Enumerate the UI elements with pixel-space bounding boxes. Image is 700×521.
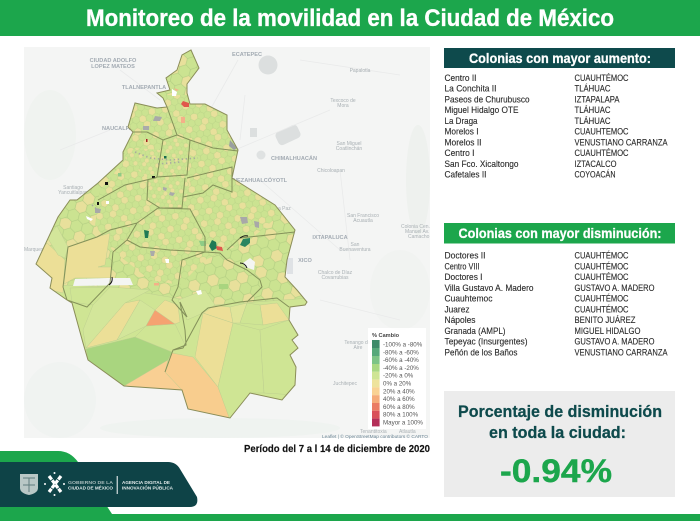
list: aumento colonias: Miguel Hidalgo OTE xyxy=(444,105,518,115)
list: disminución colonias: Nápoles xyxy=(444,315,476,325)
list: disminución colonias: Doctores I xyxy=(444,272,482,282)
heading: aumento xyxy=(444,48,675,68)
list: disminución colonias: Cuauhtemoc xyxy=(444,294,493,304)
map place labels: Aire xyxy=(354,345,363,351)
legend: 40% a 60% xyxy=(383,396,415,403)
gray speckle in dense central colonias xyxy=(92,152,198,212)
list: aumento alcaldías: COYOACÁN xyxy=(574,170,616,180)
callout value: -0.94% xyxy=(500,453,612,489)
list: disminución colonias: Tepeyac (Insurgentes) xyxy=(444,337,528,347)
panel: colonias con mayor disminución xyxy=(444,223,675,357)
list: disminución alcaldías: MIGUEL HIDALGO xyxy=(574,326,640,336)
map place labels: Juchitepec xyxy=(333,381,357,387)
heading: disminución xyxy=(444,223,675,244)
map place labels: Tenantitoxia xyxy=(360,429,387,435)
map place labels: San Miguel xyxy=(336,141,362,147)
logo divider xyxy=(117,476,118,494)
map place labels: NAUCALPAN xyxy=(102,126,137,132)
list: aumento colonias: La Draga xyxy=(444,116,478,126)
title banner xyxy=(0,0,700,36)
list: disminución alcaldías: GUSTAVO A. MADERO xyxy=(574,337,654,347)
list: aumento alcaldías: IZTAPALAPA xyxy=(574,94,620,104)
legend xyxy=(368,328,426,429)
heading: disminución: Colonias con mayor disminución: xyxy=(458,226,662,241)
period caption: Período del 7 a l 14 de diciembre de 2020 xyxy=(244,443,430,455)
map place labels: Covarrubias xyxy=(322,275,349,281)
list: aumento alcaldías xyxy=(574,73,668,180)
list: aumento colonias: Cafetales II xyxy=(444,170,486,180)
panel: colonias con mayor aumento xyxy=(444,48,675,180)
legend: Mayor a 100% xyxy=(383,420,423,426)
icon: CDMX cross emblem xyxy=(44,472,65,496)
list: aumento colonias: San Fco. Xicaltongo xyxy=(444,159,518,169)
map place labels: IXTAPALUCA xyxy=(312,235,348,241)
list: disminución alcaldías: CUAUHTÉMOC xyxy=(574,272,629,282)
logo text: agencia xyxy=(122,480,174,490)
map basemap xyxy=(24,47,430,438)
legend: -40% a -20% xyxy=(383,365,419,372)
map place labels: Chalco de Díaz xyxy=(318,270,353,276)
callout label: Porcentaje de disminución xyxy=(458,403,662,421)
city outline xyxy=(36,50,307,418)
map place labels: TLALNEPANTLA xyxy=(122,85,166,91)
title banner: Monitoreo de la movilidad en la Ciudad de México xyxy=(86,5,614,32)
map place labels: La Paz xyxy=(275,206,291,212)
list: disminución alcaldías: GUSTAVO A. MADERO xyxy=(574,283,654,293)
legend: -20% a 0% xyxy=(383,373,414,380)
map place labels: Manuel Av. xyxy=(405,229,429,235)
list: disminución colonias: Villa Gustavo A. Madero xyxy=(444,283,534,293)
map place labels: San Francisco xyxy=(347,213,379,219)
legend: 20% a 40% xyxy=(383,388,415,395)
callout label: en toda la ciudad: xyxy=(489,424,626,442)
map place labels: CHIMALHUACÁN xyxy=(271,155,317,162)
list: aumento alcaldías: CUAUHTEMOC xyxy=(574,127,629,137)
footer band xyxy=(0,451,700,521)
map place labels: ECATEPEC xyxy=(232,52,262,58)
choropleth of Ciudad de México xyxy=(36,50,306,418)
map place labels: XICO xyxy=(298,258,312,264)
footer logos xyxy=(20,472,174,496)
boundaries between alcaldías xyxy=(63,107,295,372)
list: aumento colonias: Morelos II xyxy=(444,137,482,147)
map place labels: Buenaventura xyxy=(339,247,371,253)
black line segments xyxy=(109,236,248,285)
heading: aumento: Colonias con mayor aumento: xyxy=(469,51,651,66)
logo text: gobierno: CIUDAD DE MÉXICO xyxy=(68,486,114,490)
list: disminución colonias xyxy=(444,251,534,357)
panel: porcentaje de disminución xyxy=(444,391,675,497)
list: disminución alcaldías: CUAUHTÉMOC xyxy=(574,294,629,304)
panel: map xyxy=(24,47,430,439)
list: disminución colonias: Granada (AMPL) xyxy=(444,326,506,336)
map place labels: Tenango del xyxy=(344,340,372,346)
legend: 80% a 100% xyxy=(383,412,419,419)
list: disminución alcaldías: CUAUHTÉMOC xyxy=(574,251,629,261)
list: disminución colonias: Centro VIII xyxy=(444,261,480,271)
map place labels: Yancuitlalpan xyxy=(58,190,88,196)
list: aumento alcaldías: TLÁHUAC xyxy=(574,105,611,115)
list: aumento alcaldías: CUAUHTÉMOC xyxy=(574,73,629,83)
map place labels xyxy=(24,52,430,435)
map attribution: Leaflet | © OpenStreetMap contributors © CARTO xyxy=(322,433,428,439)
logo text: gobierno: GOBIERNO DE LA xyxy=(68,480,114,485)
list: disminución alcaldías: CUAUHTÉMOC xyxy=(574,261,629,271)
list: disminución alcaldías: BENITO JUÁREZ xyxy=(574,315,636,325)
legend: -100% a -80% xyxy=(383,342,423,348)
list: disminución alcaldías: VENUSTIANO CARRANZA xyxy=(574,347,668,357)
list: disminución colonias: Juarez xyxy=(444,304,470,314)
map place labels: Colonia Cen. xyxy=(401,224,430,230)
map place labels: Santiago xyxy=(63,185,83,191)
list: aumento colonias: Centro I xyxy=(444,148,474,158)
list: disminución colonias: Doctores II xyxy=(444,251,486,261)
list: disminución alcaldías xyxy=(574,251,668,357)
list: aumento alcaldías: CUAUHTÉMOC xyxy=(574,148,629,158)
map place labels: Papalotla xyxy=(350,68,371,74)
large southern and western polygons xyxy=(30,226,310,420)
map place labels: Chicoloapan xyxy=(317,168,345,174)
map place labels: Marquesa xyxy=(24,247,46,253)
map place labels: Coatlinchán xyxy=(336,146,362,152)
logo text: agencia: INNOVACIÓN PÚBLICA xyxy=(122,486,174,490)
map place labels: San xyxy=(351,242,360,248)
list: aumento colonias: La Conchita II xyxy=(444,84,496,94)
list: aumento colonias: Centro II xyxy=(444,73,476,83)
list: aumento alcaldías: TLÁHUAC xyxy=(574,84,611,94)
legend: % Cambio xyxy=(372,333,400,339)
legend: -80% a -60% xyxy=(383,349,419,356)
list: disminución alcaldías: CUAUHTÉMOC xyxy=(574,304,629,314)
list: aumento alcaldías: VENUSTIANO CARRANZA xyxy=(574,137,668,147)
list: aumento colonias: Morelos I xyxy=(444,127,478,137)
list: aumento colonias: Paseos de Churubusco xyxy=(444,94,530,104)
icon: coat of arms shield xyxy=(20,474,38,495)
map place labels: LOPEZ MATEOS xyxy=(91,64,135,70)
list: disminución colonias: Peñón de los Baños xyxy=(444,347,518,357)
map place labels: Atlautla xyxy=(399,429,416,435)
map place labels: Acuautla xyxy=(353,218,373,224)
legend: -60% a -40% xyxy=(383,357,419,364)
logo text: agencia: AGENCIA DIGITAL DE xyxy=(122,480,170,485)
legend: 0% a 20% xyxy=(383,380,412,388)
logo text: gobierno xyxy=(68,480,114,490)
callout label xyxy=(458,403,662,442)
map place labels: Texcoco de xyxy=(330,98,356,104)
map place labels: CIUDAD ADOLFO xyxy=(90,58,137,64)
list: aumento alcaldías: TLÁHUAC xyxy=(574,116,611,126)
list: aumento alcaldías: IZTACALCO xyxy=(574,159,616,169)
map place labels: NEZAHUALCÓYOTL xyxy=(233,176,288,184)
list: aumento colonias xyxy=(444,73,530,180)
map place labels: Mora xyxy=(337,103,349,109)
legend: 60% a 80% xyxy=(383,404,415,411)
highlighted colonias xyxy=(73,88,259,295)
map place labels: Camacho xyxy=(408,234,430,240)
